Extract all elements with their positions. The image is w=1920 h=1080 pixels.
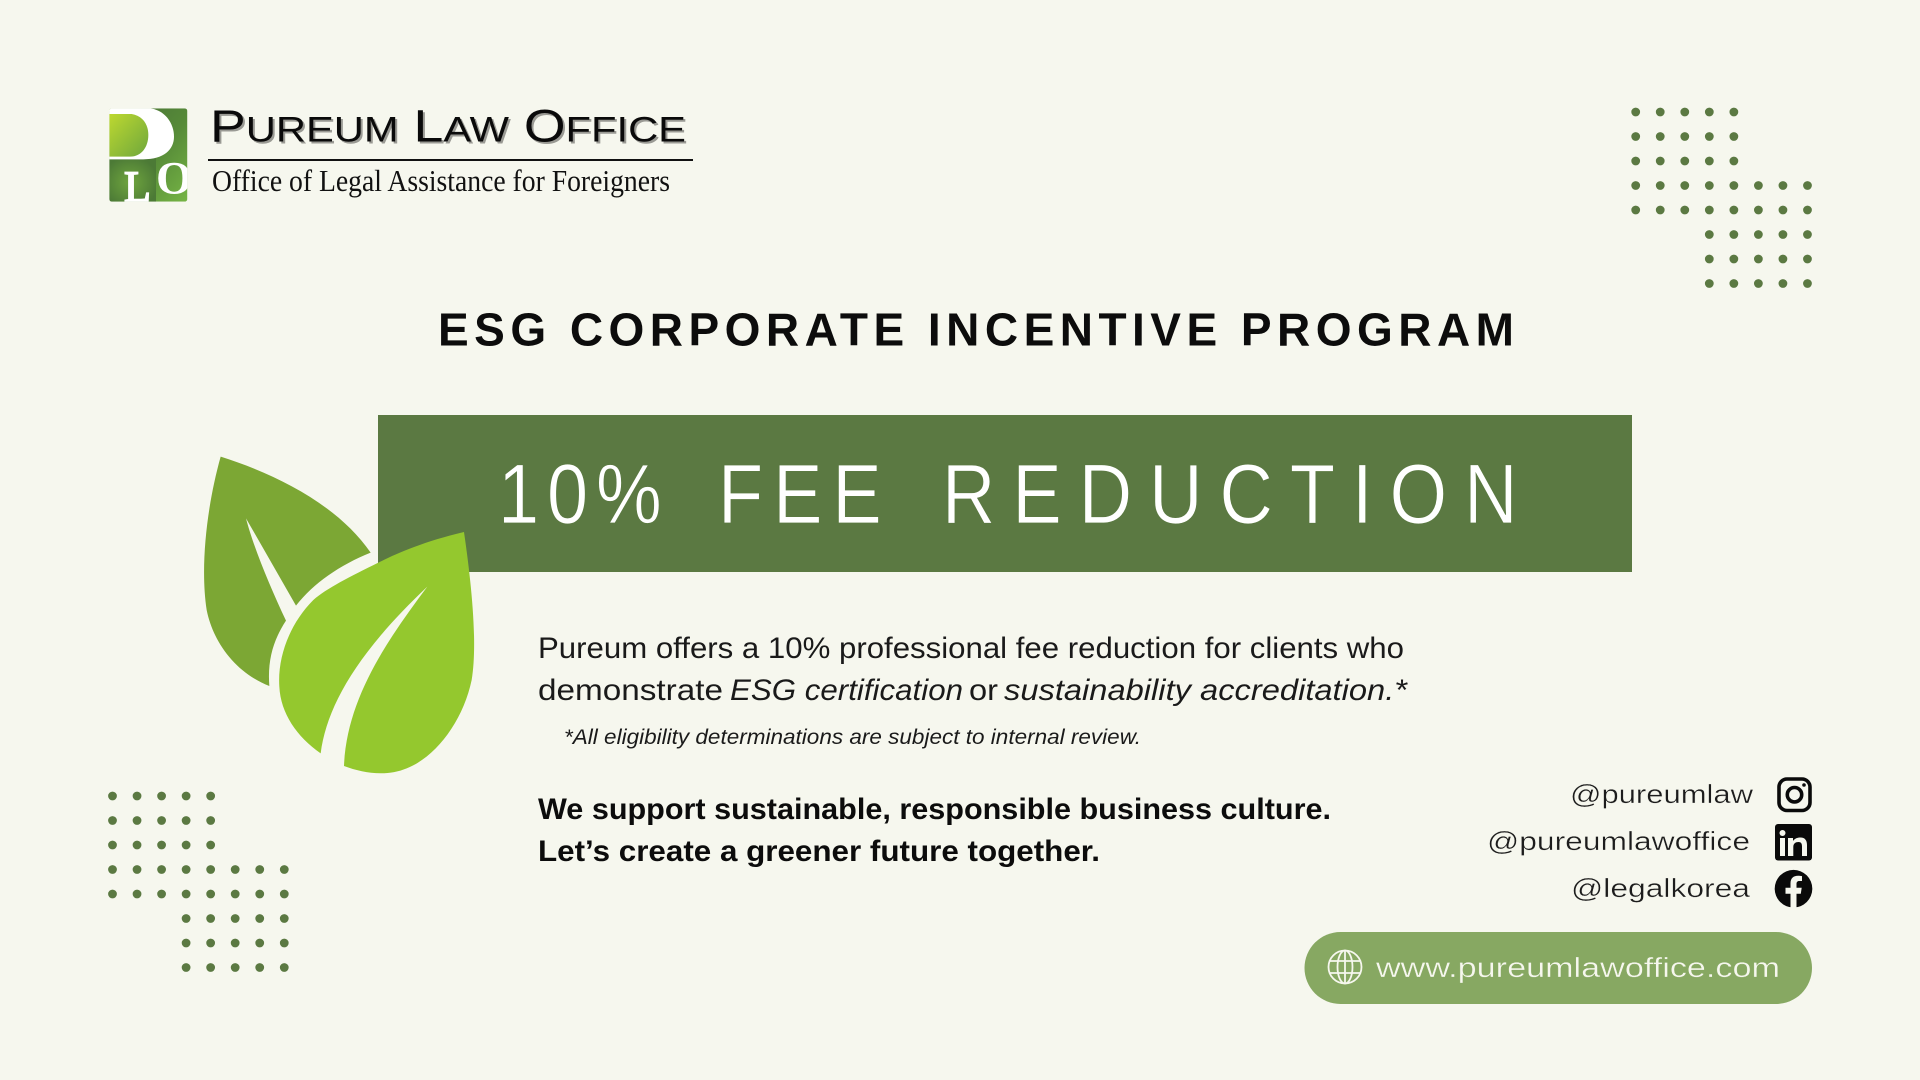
logo mark [109,108,188,202]
dark leaf [204,457,371,686]
heading: ESG CORPORATE INCENTIVE PROGRAM [438,304,1514,356]
description: or [969,674,998,707]
dot pattern: bottom left [112,796,284,968]
banner text [498,447,1518,541]
dot pattern: top right [1636,112,1808,284]
banner text: REDUCTION [942,447,1518,541]
closing statement [538,793,1331,868]
banner text: FEE [718,447,882,541]
closing statement: Let’s create a greener future together. [538,835,1100,868]
banner text: 10% [498,447,662,541]
description: Pureum offers a 10% professional fee reduction for clients who [538,632,1404,665]
logo mark: L [124,163,151,212]
description: ESG certification [730,674,963,707]
logo mark: O [156,152,192,204]
logo rule [208,159,693,161]
website url: www.pureumlawoffice.com [1375,952,1780,983]
banner [378,415,1632,572]
social handles: @pureumlaw [1570,779,1753,809]
footnote: *All eligibility determinations are subject to internal review. [564,726,1141,749]
icon: globe [1328,950,1362,984]
logo [109,108,693,202]
firm tagline: Office of Legal Assistance for Foreigners [212,163,670,198]
icon: linkedin [1775,824,1812,860]
website pill [1304,932,1812,1004]
social handles: @legalkorea [1571,873,1751,903]
description [538,632,1409,707]
light leaf [279,532,474,773]
social handles [1487,779,1753,903]
closing statement: We support sustainable, responsible business culture. [538,793,1331,826]
icon: instagram [1779,779,1810,810]
icon: facebook [1775,870,1812,908]
social handles: @pureumlawoffice [1487,826,1750,856]
description: sustainability accreditation.* [1004,674,1409,707]
icon: leaves [204,457,474,773]
description: demonstrate [538,674,723,707]
firm name: PUREUM LAW O FFICE [210,100,686,152]
firm name: PUREUM LAW O FFICE [212,102,688,154]
